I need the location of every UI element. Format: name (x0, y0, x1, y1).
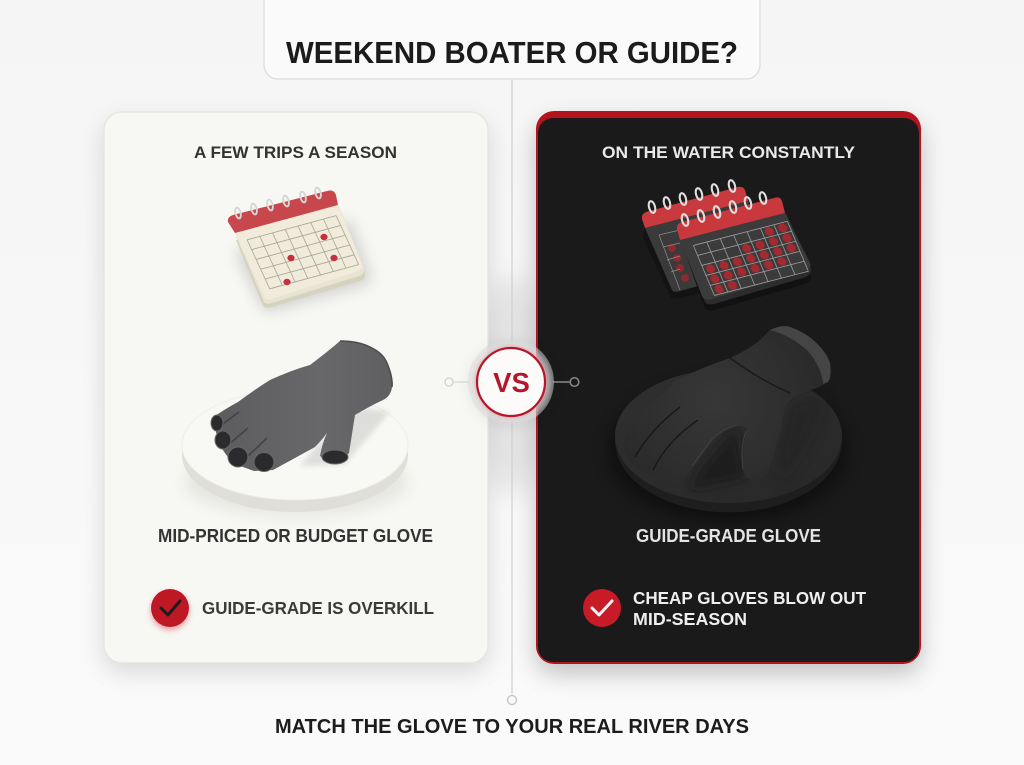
heading: on the water: ON THE WATER CONSTANTLY (602, 143, 856, 162)
heading: a few trips: A FEW TRIPS A SEASON (194, 143, 397, 162)
panel: guide (536, 111, 921, 674)
verdict: overkill (151, 589, 434, 630)
panel: weekend boater (104, 112, 488, 672)
verdict: cheap gloves blow out: CHEAP GLOVES BLOW OUT (633, 588, 866, 608)
verdict: overkill: GUIDE-GRADE IS OVERKILL (202, 598, 434, 618)
icon: full neoprene glove on dark plate (608, 326, 848, 522)
center divider line (508, 79, 516, 704)
icon: calendar with few marked days (228, 187, 372, 312)
verdict: cheap gloves blow out (583, 588, 866, 629)
icon: two calendars full of marked days (642, 179, 811, 310)
label: guide-grade glove: GUIDE-GRADE GLOVE (636, 526, 821, 546)
title: WEEKEND BOATER OR GUIDE? (286, 35, 738, 70)
vs badge (445, 339, 579, 425)
verdict: cheap gloves blow out: MID-SEASON (633, 609, 747, 629)
title box (264, 0, 760, 79)
vs text: VS (493, 367, 530, 398)
icon: fingerless glove on white plate (182, 341, 408, 516)
label: budget glove: MID-PRICED OR BUDGET GLOVE (158, 526, 433, 546)
footer takeaway: MATCH THE GLOVE TO YOUR REAL RIVER DAYS (275, 715, 749, 738)
